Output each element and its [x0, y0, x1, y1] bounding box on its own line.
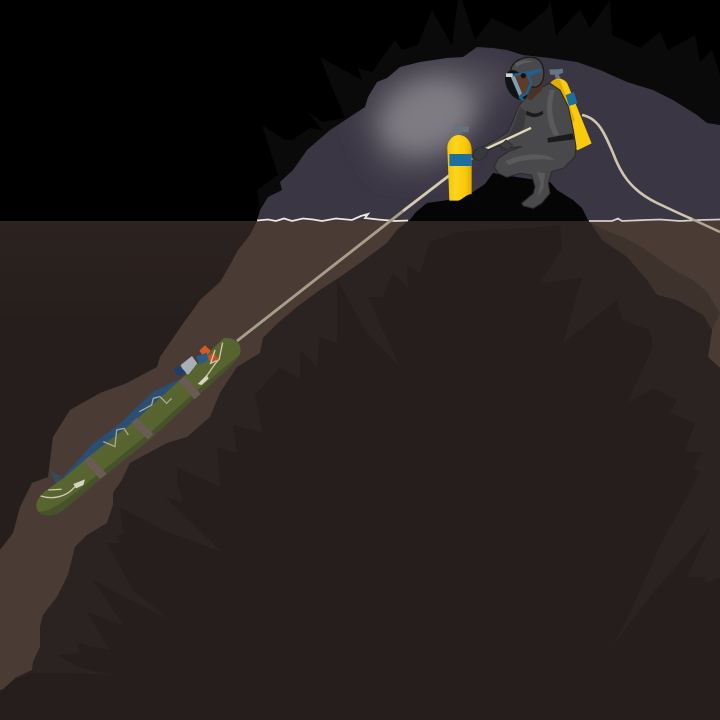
- lighter rock beneath the passage: [0, 221, 720, 720]
- air chamber: [257, 47, 720, 221]
- back tank: [549, 69, 592, 150]
- water surface line, right: [589, 218, 720, 221]
- tank band: [449, 154, 472, 166]
- hose under water: [692, 219, 720, 232]
- rope squiggle rear: [103, 428, 128, 447]
- black background above water: [0, 0, 720, 222]
- shaded far arm: [488, 107, 526, 147]
- handheld rope: [485, 128, 531, 149]
- stretcher raft with casualty: [36, 338, 241, 515]
- near hand on rope: [500, 140, 513, 150]
- casualty's life vest: [205, 353, 219, 361]
- raft body: [36, 338, 241, 515]
- casualty's mask: [181, 356, 197, 375]
- blue wrap: [63, 379, 187, 481]
- diver silhouette: [473, 83, 576, 208]
- dark inner rock with spikes: [0, 225, 720, 720]
- flooded passage, right: [589, 221, 720, 368]
- tank body: [447, 135, 472, 201]
- neck: [524, 83, 544, 101]
- strap 2: [131, 418, 153, 439]
- yellow air tank: [447, 124, 472, 201]
- guide rope submerged section: [237, 211, 403, 341]
- rock mound under diver: [408, 173, 589, 222]
- mask left glare: [511, 76, 522, 96]
- hose from back tank, air section: [582, 115, 692, 219]
- guide rope above water: [403, 158, 472, 211]
- casualty's fin: [50, 471, 65, 487]
- rope squiggle middle: [139, 397, 172, 412]
- raft dark underside: [38, 354, 240, 515]
- headlamp light beam: [360, 58, 510, 172]
- helmet strap: [526, 68, 542, 77]
- rope knot tail: [73, 479, 85, 488]
- mask frame: [510, 73, 531, 100]
- headlamp: [506, 73, 513, 77]
- rope knot front: [198, 375, 209, 385]
- rope squiggle tail: [41, 487, 75, 498]
- flooded passage, left: [0, 221, 408, 690]
- mask rim: [500, 66, 533, 104]
- strap 1: [179, 376, 201, 399]
- strap 3: [84, 456, 107, 479]
- tank valve: [455, 124, 469, 135]
- mask knob: [521, 73, 526, 78]
- waist belt: [547, 133, 574, 143]
- passage shadow band, right: [589, 221, 720, 330]
- casualty's blue valve: [174, 366, 186, 377]
- body highlights: [505, 90, 559, 197]
- casualty's hood: [199, 345, 211, 356]
- rope squiggle front: [202, 343, 223, 382]
- diver: [473, 57, 592, 208]
- helmet: [511, 57, 544, 87]
- water surface line: [257, 214, 408, 221]
- helmet highlight: [515, 60, 533, 67]
- mask lens: [511, 73, 531, 97]
- underground rock mass: [0, 221, 720, 720]
- gloved hand: [473, 147, 488, 161]
- stalactite halo around the air chamber: [257, 0, 720, 210]
- chest strap: [526, 111, 543, 117]
- casualty's blue collar: [196, 353, 209, 365]
